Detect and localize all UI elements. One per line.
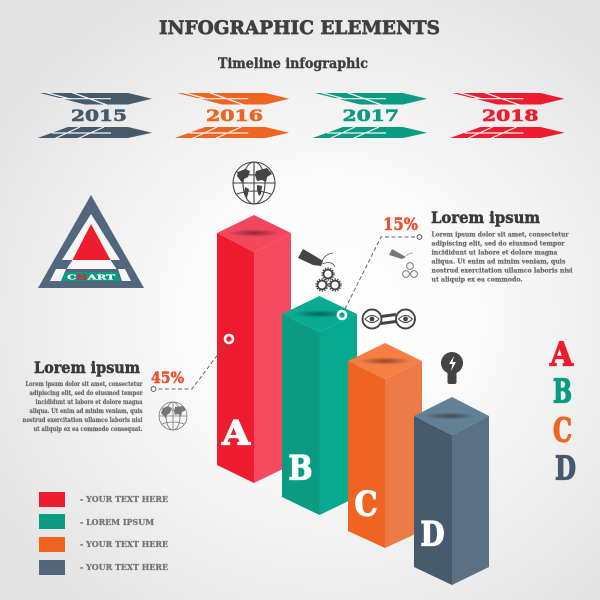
icon: small bottle and gears xyxy=(389,249,417,277)
callout: 45% connector xyxy=(151,335,233,391)
callout: 15% connector xyxy=(338,235,422,319)
text block: left heading: Lorem ipsum xyxy=(34,358,140,377)
text block: left body: ut aliquip ex ea commodo consequat. xyxy=(34,425,142,433)
letter index: C xyxy=(553,410,572,450)
bar D: D xyxy=(420,514,444,554)
callout: 45% value: 45% xyxy=(151,368,184,387)
triangle chart logo xyxy=(38,195,144,288)
icon: bottle and gears xyxy=(298,249,341,291)
legend xyxy=(39,492,168,575)
timeline item: 2017: 2017 xyxy=(342,106,399,125)
subtitle: Timeline infographic xyxy=(218,56,368,72)
text block: right body: incididunt ut labore et dolore magna xyxy=(432,248,558,256)
letter index: A xyxy=(549,334,573,374)
letter index: B xyxy=(553,372,572,410)
text block: right body: aliqua. Ut enim ad minim veniam, quis xyxy=(432,258,566,266)
text block: right body: ut aliquip ex ea commodo. xyxy=(432,276,522,284)
timeline item: 2016: 2016 xyxy=(206,106,263,125)
bar C xyxy=(348,343,422,548)
timeline item: 2015 xyxy=(38,92,152,138)
triangle chart logo: C H ART xyxy=(67,274,115,282)
legend item: slate: - YOUR TEXT HERE xyxy=(80,562,168,572)
text block: right body xyxy=(432,230,573,284)
timeline item: 2015: 2015 xyxy=(71,106,127,125)
text block: left body: nostrud exercitation ullamco laboris nisi xyxy=(22,416,143,424)
icon: eyes link xyxy=(362,310,415,328)
icon: small globe xyxy=(159,402,187,430)
bar B: B xyxy=(288,448,312,488)
text block: right body: adipiscing elit, sed do eiusmod tempor xyxy=(432,240,565,248)
bar D xyxy=(414,397,489,585)
text block: left body: Lorem ipsum dolor sit amet, consectetur xyxy=(26,380,143,388)
title: INFOGRAPHIC ELEMENTS xyxy=(159,17,440,39)
text block: left body: adipiscing elit, sed do eiusmod tempor xyxy=(30,389,143,397)
timeline item: 2016 xyxy=(175,92,289,138)
bar A xyxy=(217,215,291,483)
bar B xyxy=(282,296,357,515)
timeline item: 2018 xyxy=(450,92,564,138)
letter index: D xyxy=(555,448,576,488)
icon: light bulb xyxy=(441,352,463,384)
bar C: C xyxy=(354,484,378,524)
text block: right body: Lorem ipsum dolor sit amet, consectetur xyxy=(432,230,569,238)
text block: right heading: Lorem ipsum xyxy=(431,208,540,227)
text block: left body xyxy=(22,380,143,433)
callout: 15% value: 15% xyxy=(383,215,418,235)
timeline item: 2018: 2018 xyxy=(482,106,538,125)
timeline item: 2017 xyxy=(312,92,427,138)
text block: right body: nostrud exercitation ullamco laboris nisi xyxy=(432,266,573,274)
legend item: red: - YOUR TEXT HERE xyxy=(80,494,168,504)
legend item: orange: - YOUR TEXT HERE xyxy=(80,539,168,549)
text block: left body: incididunt ut labore et dolore magna xyxy=(36,398,143,406)
legend item: teal: - LOREM IPSUM xyxy=(80,517,154,527)
letter index xyxy=(549,334,576,488)
text block: left body: aliqua. Ut enim ad minim veniam, quis xyxy=(30,407,143,415)
bar A: A xyxy=(221,414,251,454)
icon: globe xyxy=(233,162,275,204)
